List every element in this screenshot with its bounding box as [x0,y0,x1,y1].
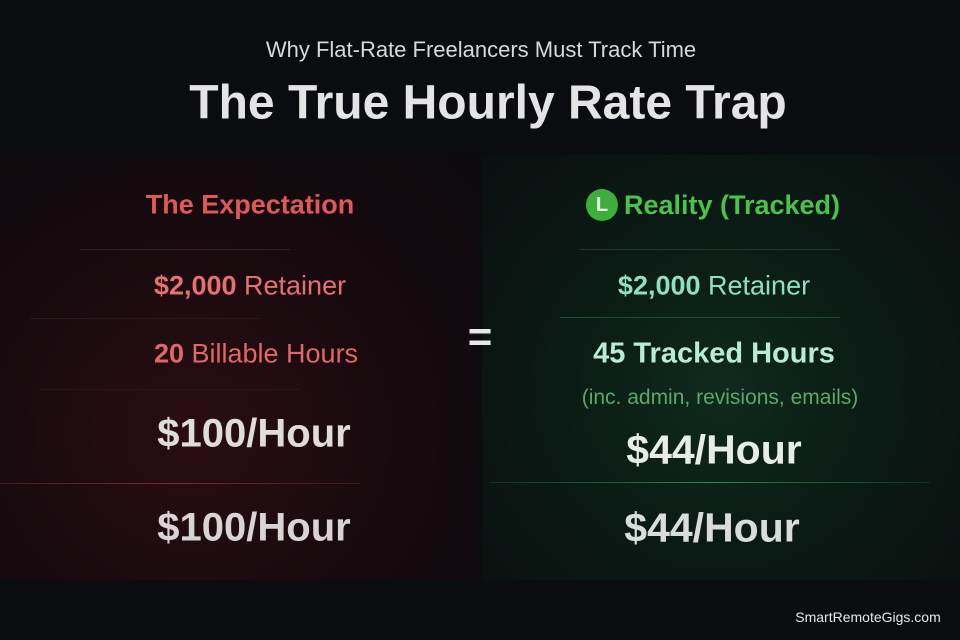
background panel: reality [482,155,960,580]
text: 44 per hour result: $44/Hour [624,504,800,550]
text: 100 per hour result: $100/Hour [157,506,351,550]
heading: expectation: The Expectation [146,190,354,220]
footer: SmartRemoteGigs.com [795,609,941,625]
text: retainer right: $2,000 Retainer [618,270,810,300]
text: 100 per hour: $100/Hour [157,412,351,456]
text: 44 per hour: $44/Hour [626,426,802,472]
text: retainer left: $2,000 Retainer [154,270,346,300]
text: inc admin: (inc. admin, revisions, emails) [582,386,858,409]
heading: reality: Reality (Tracked) [624,190,840,220]
subtitle: Why Flat-Rate Freelancers Must Track Time [266,37,696,62]
equals sign: = [468,313,492,360]
text: tracked hours: 45 Tracked Hours [593,338,835,370]
icon: green badge: L [596,194,608,216]
icon: green badge [586,189,618,221]
title: The True Hourly Rate Trap [189,76,787,130]
text: billable hours: 20 Billable Hours [154,338,358,368]
background panel: expectation [0,155,478,580]
